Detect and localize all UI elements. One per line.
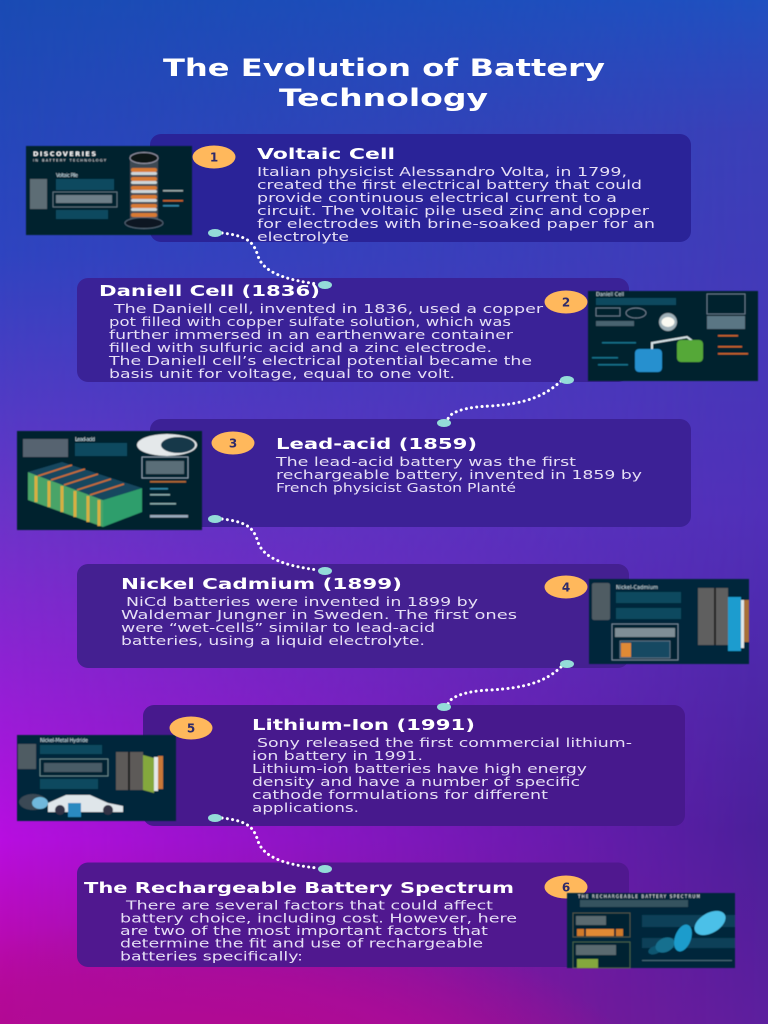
- badge: 4: [544, 576, 588, 598]
- heading: nickel cadmium: Nickel Cadmium (1899): [121, 575, 402, 593]
- panel: voltaic cell: [150, 134, 691, 244]
- image: voltaic pile: DISCOVERIES: [33, 150, 96, 158]
- text: daniell cell description: The Daniell cell, invented in 1836, used a copper: [113, 301, 544, 316]
- text: daniell cell description: filled with sulfuric acid and a zinc electrode.: [109, 340, 492, 355]
- text: lithium-ion description: ion battery in 1991.: [252, 748, 423, 763]
- title: Technology: [279, 84, 488, 112]
- badge: 2: [544, 290, 588, 314]
- text: lithium-ion description: density and have a number of specific: [252, 774, 580, 789]
- text: spectrum description: are two of the most important factors that: [120, 923, 488, 938]
- badge: 4: 4: [562, 580, 570, 594]
- panel: rechargeable battery spectrum: [77, 862, 629, 967]
- panel: lead-acid: [150, 419, 691, 527]
- heading: rechargeable battery spectrum: The Rechargeable Battery Spectrum: [84, 879, 514, 897]
- text: lithium-ion description: Lithium-ion batteries have high energy: [252, 761, 588, 776]
- text: nickel cadmium description: NiCd batteries were invented in 1899 by: [126, 594, 479, 609]
- text: spectrum description: determine the fit and use of rechargeable: [120, 936, 483, 951]
- text: spectrum description: There are several factors that could affect: [125, 898, 493, 912]
- text: daniell cell description: further immersed in an earthenware container: [109, 327, 514, 342]
- image: battery spectrum chart: THE RECHARGEABLE BATTERY SPECTRUM: [577, 894, 701, 899]
- panel: daniell cell: [77, 278, 629, 382]
- badge: 1: [192, 146, 236, 168]
- connector 3 to 4: [208, 515, 332, 575]
- image: daniell cell: [588, 291, 758, 381]
- connector 1 to 2: [208, 229, 332, 289]
- badge: 6: [544, 876, 588, 898]
- image: lead-acid battery: Lead-acid: [75, 437, 95, 443]
- text: nickel cadmium description: [121, 594, 517, 648]
- image: battery spectrum chart: [567, 893, 735, 968]
- text: daniell cell description: The Daniell cell’s electrical potential became the: [108, 353, 532, 368]
- image: voltaic pile: IN BATTERY TECHNOLOGY: [33, 158, 107, 162]
- text: nickel cadmium description: were “wet-cells” similar to lead-acid: [121, 620, 435, 635]
- panel: nickel cadmium: [77, 564, 629, 668]
- panel: lithium-ion: [143, 705, 685, 826]
- text: lithium-ion description: cathode formulations for different: [252, 787, 548, 802]
- text: voltaic cell description: for electrodes with brine-soaked paper for an: [257, 216, 655, 231]
- text: daniell cell description: [108, 301, 544, 381]
- image: nickel cadmium battery: Nickel-Cadmium: [616, 585, 658, 591]
- text: lithium-ion description: applications.: [252, 800, 359, 815]
- heading: daniell cell: Daniell Cell (1836): [99, 282, 320, 300]
- text: nickel cadmium description: batteries, using a liquid electrolyte.: [121, 633, 425, 648]
- text: lithium-ion description: Sony released the first commercial lithium-: [257, 735, 632, 750]
- text: voltaic cell description: electrolyte: [257, 229, 349, 244]
- text: voltaic cell description: circuit. The voltaic pile used zinc and copper: [257, 203, 650, 218]
- connector 4 to 5: [437, 660, 574, 711]
- connector 5 to 6: [208, 814, 332, 873]
- text: lead-acid description: [275, 454, 643, 495]
- text: daniell cell description: basis unit for voltage, equal to one volt.: [109, 366, 455, 381]
- text: voltaic cell description: [257, 164, 655, 244]
- connector 2 to 3: [437, 376, 574, 427]
- heading: voltaic cell: Voltaic Cell: [257, 145, 395, 163]
- text: voltaic cell description: created the first electrical battery that could: [257, 177, 642, 192]
- text: spectrum description: battery choice, including cost. However, here: [120, 910, 517, 925]
- text: spectrum description: [120, 898, 517, 964]
- image: voltaic pile: [26, 146, 192, 235]
- text: lead-acid description: rechargeable battery, invented in 1859 by: [276, 467, 643, 482]
- text: daniell cell description: pot filled with copper sulfate solution, which was: [109, 314, 511, 329]
- badge: 5: 5: [187, 722, 195, 736]
- image: lead-acid battery: [17, 431, 202, 530]
- title: [163, 54, 605, 112]
- text: voltaic cell description: provide continuous electrical current to a: [257, 190, 617, 205]
- badge: 1: 1: [210, 150, 218, 164]
- badge: 3: [212, 432, 254, 454]
- image: voltaic pile: Voltaic Pile: [56, 173, 78, 179]
- heading: lithium-ion: Lithium-Ion (1991): [252, 716, 475, 734]
- text: spectrum description: batteries specifically:: [120, 948, 303, 964]
- image: daniell cell: Daniell Cell: [596, 292, 624, 298]
- text: lithium-ion description: [252, 735, 632, 815]
- badge: 6: 6: [562, 880, 570, 894]
- badge: 5: [170, 716, 212, 740]
- text: lead-acid description: French physicist Gaston Planté: [276, 480, 516, 495]
- image: nickel cadmium battery: [589, 579, 749, 664]
- text: lead-acid description: The lead-acid battery was the first: [275, 454, 576, 469]
- heading: lead-acid: Lead-acid (1859): [276, 435, 477, 453]
- badge: 3: 3: [229, 436, 237, 450]
- badge: 2: 2: [562, 296, 570, 310]
- text: voltaic cell description: Italian physicist Alessandro Volta, in 1799,: [257, 164, 627, 179]
- image: nickel metal hydride battery: Nickel-Metal Hydride: [40, 738, 88, 744]
- image: nickel metal hydride battery: [17, 735, 176, 821]
- text: nickel cadmium description: Waldemar Jungner in Sweden. The first ones: [121, 607, 517, 622]
- title: The Evolution of Battery: [163, 54, 605, 82]
